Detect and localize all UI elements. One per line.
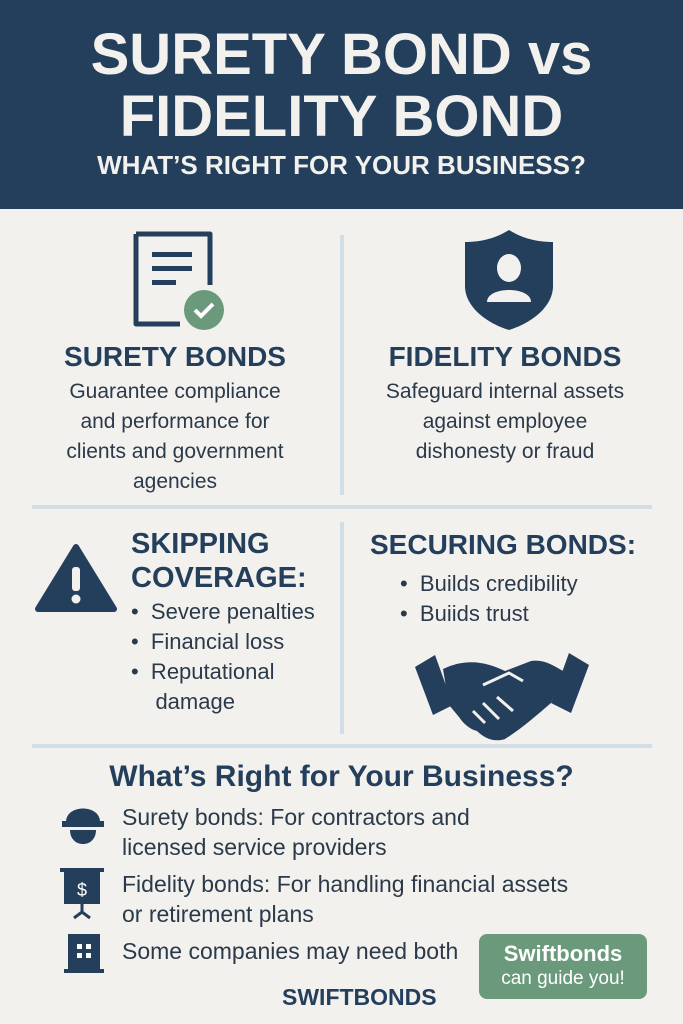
text: surety item: licensed service providers [122, 834, 387, 860]
panel: fidelity bonds [386, 341, 624, 463]
brand: swiftbonds: SWIFTBONDS [282, 984, 437, 1010]
text: fidelity item [122, 871, 568, 927]
list: benefits [400, 571, 578, 626]
text: surety item: Surety bonds: For contractors and [122, 804, 470, 830]
panel: skipping coverage [131, 528, 315, 714]
list: consequences [131, 599, 315, 714]
text: fidelity description: dishonesty or fraud [416, 440, 594, 463]
list: benefits: • Buiids trust [400, 601, 529, 626]
icon: shield with person [465, 230, 553, 330]
heading: securing bonds: SECURING BONDS: [370, 529, 636, 560]
callout: swiftbonds guide: Swiftbonds [504, 941, 622, 966]
text: fidelity item: Fidelity bonds: For handling financial assets [122, 871, 568, 897]
icon: handshake [415, 653, 589, 740]
text: surety description: agencies [133, 470, 217, 493]
icon: building [64, 934, 104, 973]
icon: dollar board [60, 868, 104, 920]
icon: document with check [134, 232, 224, 330]
text: surety description [66, 380, 284, 493]
text: fidelity description: against employee [423, 410, 587, 433]
text: both item: Some companies may need both [122, 938, 458, 964]
header banner [0, 0, 683, 209]
list: benefits: • Builds credibility [400, 571, 578, 596]
heading: surety bonds: SURETY BONDS [64, 341, 286, 372]
panel: surety bonds [64, 341, 286, 493]
text: surety description: and performance for [80, 410, 270, 433]
title [91, 22, 592, 149]
list: consequences: • Financial loss [131, 629, 284, 654]
text: fidelity description: Safeguard internal assets [386, 380, 624, 403]
text: surety item [122, 804, 470, 860]
text: fidelity description [386, 380, 624, 463]
panel: securing bonds [370, 529, 636, 626]
text: fidelity item: or retirement plans [122, 901, 314, 927]
heading: skipping coverage: COVERAGE: [131, 562, 307, 594]
list: consequences: • Reputational [131, 659, 274, 684]
subtitle: WHAT’S RIGHT FOR YOUR BUSINESS? [97, 150, 586, 180]
icon: warning [35, 544, 117, 612]
list: consequences: damage [155, 689, 235, 714]
callout: swiftbonds guide [479, 934, 647, 999]
icon: dollar board: $ [77, 880, 87, 900]
heading: skipping coverage: SKIPPING [131, 528, 270, 560]
list: consequences: • Severe penalties [131, 599, 315, 624]
heading: fidelity bonds: FIDELITY BONDS [389, 341, 621, 372]
heading: skipping coverage [131, 528, 307, 594]
text: surety description: Guarantee compliance [69, 380, 281, 403]
title: FIDELITY BOND [120, 84, 563, 149]
icon: hard hat [62, 808, 104, 844]
heading: what's right: What’s Right for Your Business? [109, 760, 574, 793]
callout: swiftbonds guide: can guide you! [501, 968, 625, 989]
text: surety description: clients and government [66, 440, 284, 463]
title: SURETY BOND vs [91, 22, 592, 87]
